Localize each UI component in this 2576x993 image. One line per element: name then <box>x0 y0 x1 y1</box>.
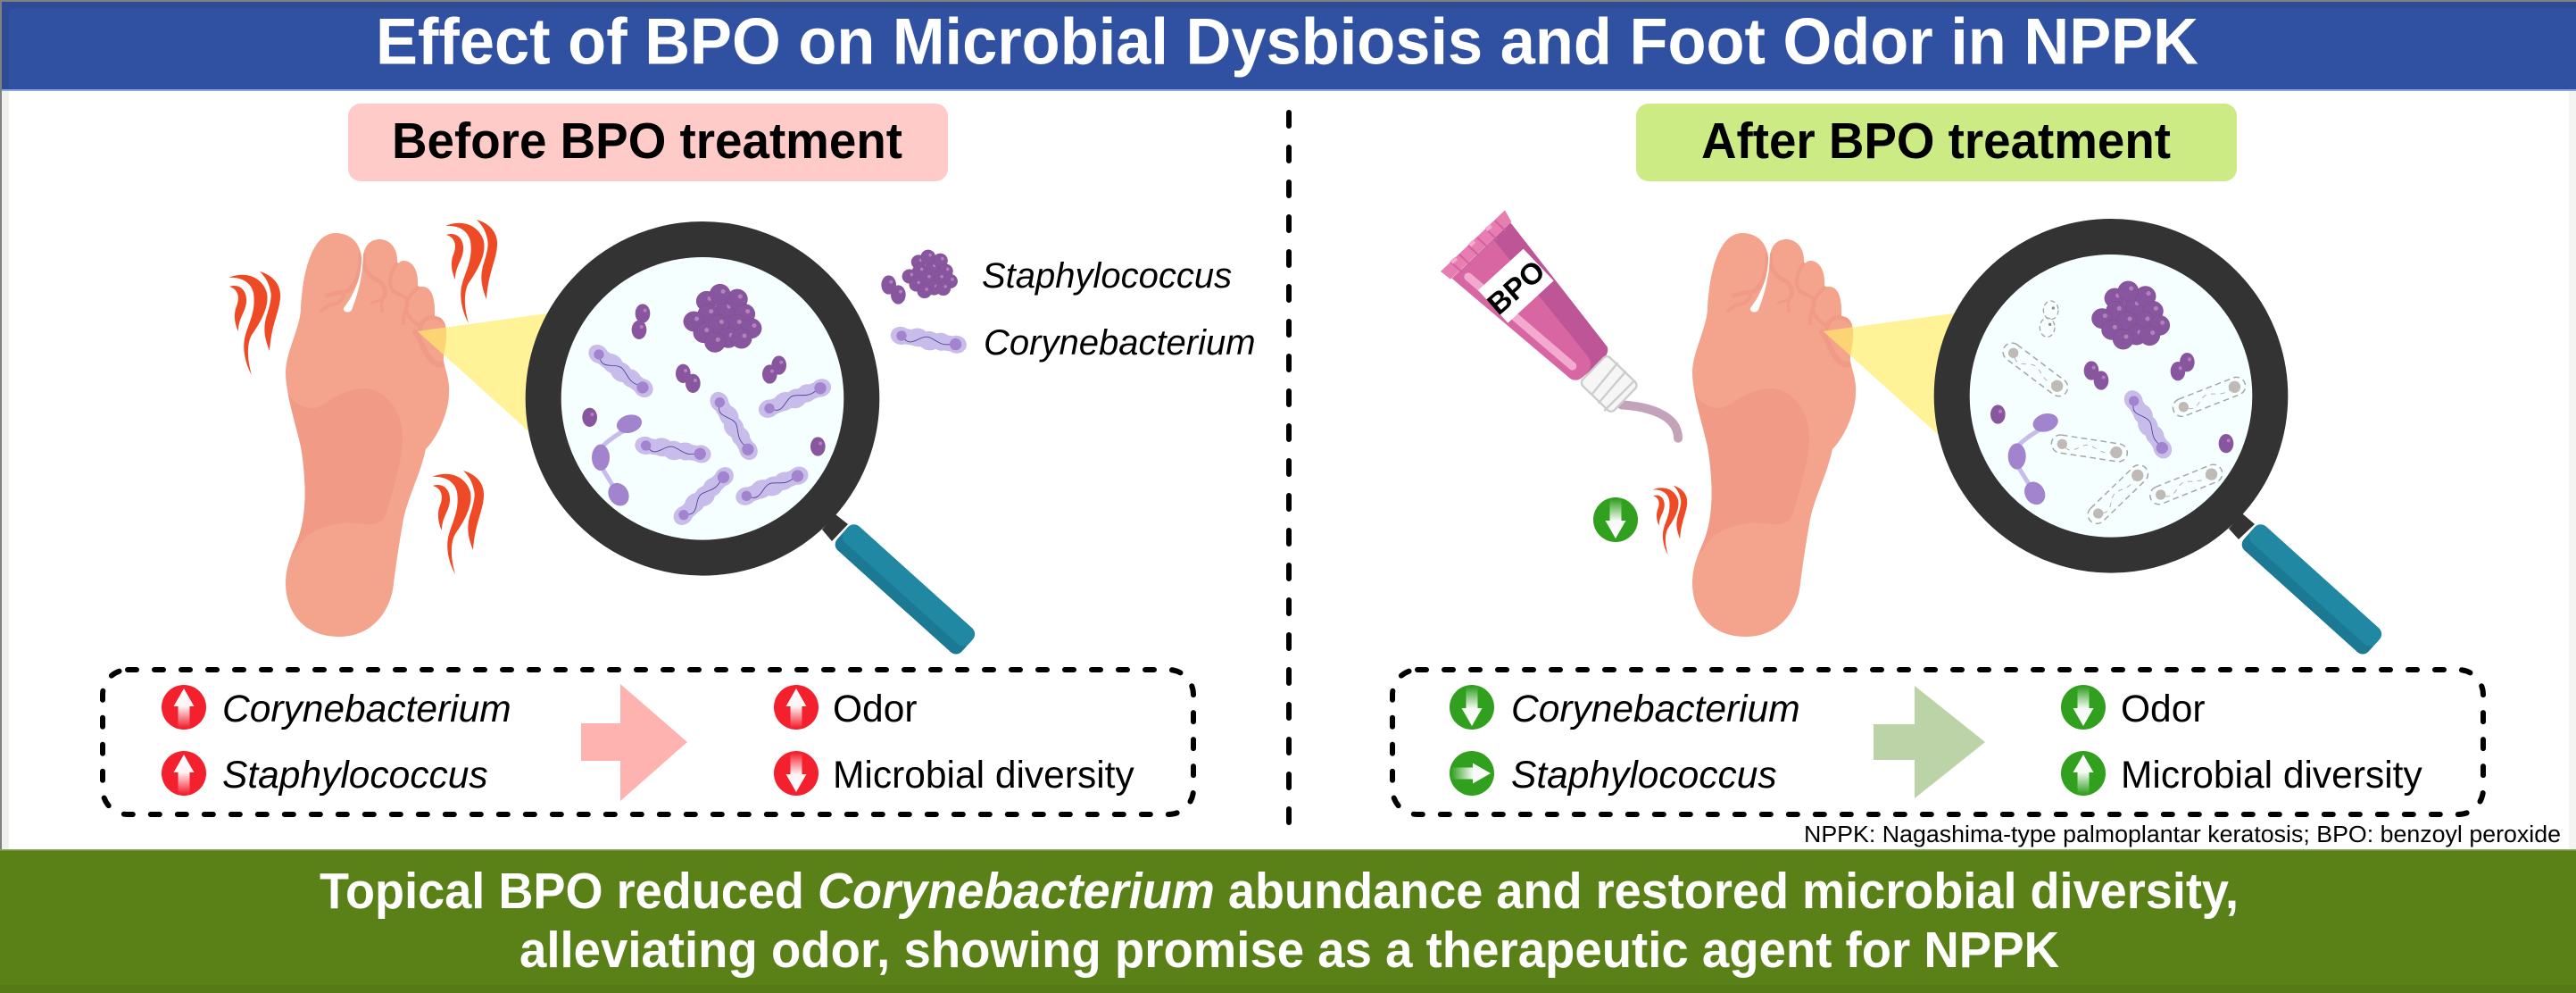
conclusion banner <box>0 849 2576 993</box>
heading: after BPO treatment <box>1636 104 2237 181</box>
bacteria in lens <box>1990 281 2248 528</box>
icon: magnifier with reduced bacteria <box>1952 237 2385 657</box>
label: odor: Odor <box>2121 688 2205 730</box>
icon: magnifier with bacteria <box>544 239 978 657</box>
label: Corynebacterium: Corynebacterium <box>1511 688 1800 730</box>
indicator: Corynebacterium up <box>162 685 206 730</box>
summary box: after <box>1392 670 2483 814</box>
icon: Corynebacterium <box>889 324 968 356</box>
label: Corynebacterium: Corynebacterium <box>984 323 1256 363</box>
label: microbial diversity: Microbial diversity <box>833 755 1134 797</box>
icon: foot <box>1674 233 1856 637</box>
summary box: before <box>103 670 1193 814</box>
panel: after BPO treatment <box>1392 104 2483 814</box>
icon: Staphylococcus <box>881 250 958 305</box>
indicator: Staphylococcus up <box>162 751 206 796</box>
indicator: Staphylococcus unchanged <box>1450 751 1494 796</box>
indicator: microbial diversity down <box>774 751 819 796</box>
icon: small odor flame <box>1652 486 1687 555</box>
label: Corynebacterium: Corynebacterium <box>222 688 511 730</box>
panel: before BPO treatment <box>103 104 1256 814</box>
indicator: odor up <box>774 685 819 730</box>
label: Staphylococcus: Staphylococcus <box>222 755 488 797</box>
icon: reduced odor indicator <box>1593 497 1638 542</box>
icon: BPO ointment tube: BPO <box>1482 255 1551 321</box>
icon: foot <box>268 233 449 637</box>
conclusion banner: alleviating odor, showing promise as a therapeutic agent for NPPK <box>519 922 2059 979</box>
title banner <box>2 2 2576 91</box>
indicator: microbial diversity up <box>2061 751 2106 796</box>
icon: odor flame top right <box>445 220 497 323</box>
heading: before BPO treatment <box>348 104 948 181</box>
bacteria in lens <box>582 284 835 530</box>
conclusion banner: Topical BPO reduced Corynebacterium abundance and restored microbial diversity, <box>320 863 2239 920</box>
label: Staphylococcus: Staphylococcus <box>1511 755 1777 797</box>
icon: odor flame lower right <box>432 471 484 574</box>
indicator: Corynebacterium down <box>1450 685 1494 730</box>
indicator: odor down <box>2061 685 2106 730</box>
heading: before BPO treatment: Before BPO treatment <box>392 113 902 170</box>
arrow: leads to <box>1874 686 1985 798</box>
label: Staphylococcus: Staphylococcus <box>982 256 1232 296</box>
heading: after BPO treatment: After BPO treatment <box>1701 113 2171 170</box>
arrow: leads to <box>581 684 687 801</box>
legend: bacteria key <box>881 250 1256 363</box>
zoom beam <box>1824 313 1959 438</box>
icon: BPO ointment tube <box>1441 210 1678 438</box>
icon: odor flame left <box>229 271 280 375</box>
label: odor: Odor <box>833 688 917 730</box>
label: microbial diversity: Microbial diversity <box>2121 755 2422 797</box>
panel divider <box>1286 113 1292 839</box>
zoom beam <box>418 313 547 431</box>
abbreviations note: NPPK: Nagashima-type palmoplantar keratosis; BPO: benzoyl peroxide <box>1804 822 2561 847</box>
title banner: Effect of BPO on Microbial Dysbiosis and Foot Odor in NPPK <box>376 5 2198 79</box>
